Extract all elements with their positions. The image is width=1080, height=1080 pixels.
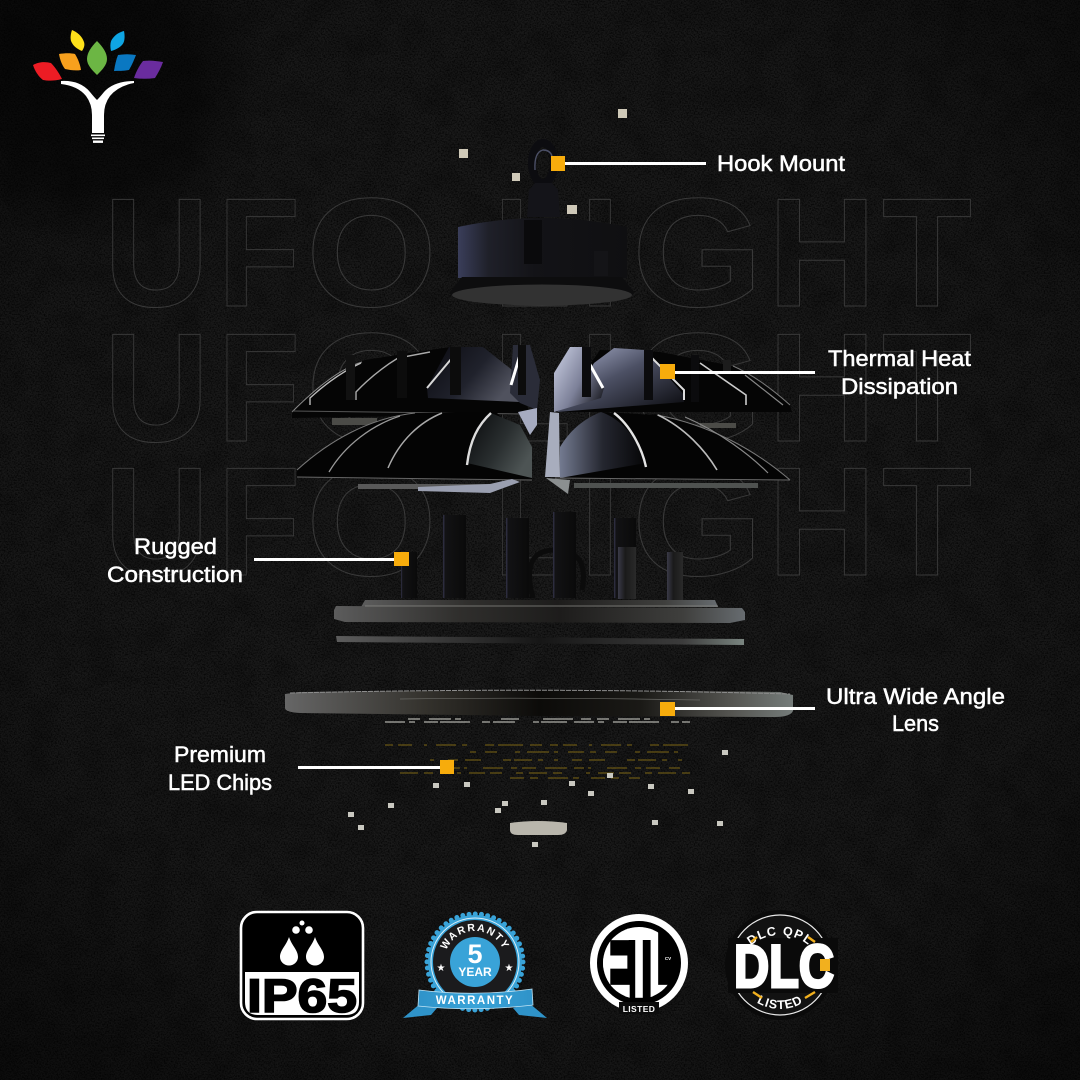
- callout: ultra wide angle lens: [660, 684, 1005, 736]
- callout: rugged construction: Rugged: [134, 534, 217, 559]
- badge: 5 year warranty: ★: [437, 963, 446, 974]
- callout: premium LED chips: Premium: [174, 742, 266, 767]
- badge: ETL listed: LISTED: [623, 1004, 655, 1014]
- heat sink fins: lower left: [297, 408, 537, 493]
- ghost outlined UFO LIGHT lettering, row 3: [104, 435, 972, 608]
- callout: ultra wide angle lens: Lens: [892, 711, 939, 736]
- ghost outlined UFO LIGHT lettering, row 3: T: [882, 435, 972, 608]
- callout: premium LED chips: [168, 742, 454, 795]
- ghost outlined UFO LIGHT lettering, row 1: [104, 166, 972, 339]
- callout: thermal heat dissipation: Thermal Heat: [828, 346, 971, 371]
- ghost outlined UFO LIGHT lettering, row 1: O: [306, 166, 437, 339]
- ghost outlined UFO LIGHT lettering, row 3: I: [580, 435, 620, 608]
- badge: IP65: IP65: [247, 969, 357, 1022]
- badge: 5 year warranty: 5: [467, 939, 483, 969]
- callout: rugged construction: [107, 534, 409, 587]
- ghost outlined UFO LIGHT lettering, row 1: F: [218, 166, 300, 339]
- callout: rugged construction: Construction: [107, 562, 243, 587]
- badge: DLC QPL listed: DLC QPL: [746, 926, 809, 945]
- callout: thermal heat dissipation: Dissipation: [841, 374, 958, 399]
- hook mount housing: [450, 143, 634, 306]
- badge: 5 year warranty: YEAR: [458, 965, 492, 979]
- ghost outlined UFO LIGHT lettering, row 2: I: [580, 301, 620, 474]
- badge: ETL listed: E: [600, 907, 631, 1019]
- ghost outlined UFO LIGHT lettering, row 3: G: [632, 435, 763, 608]
- ghost outlined UFO LIGHT lettering, row 2: L: [494, 301, 571, 474]
- badge: 5 year warranty: [403, 912, 547, 1018]
- ghost outlined UFO LIGHT lettering, row 3: F: [218, 435, 300, 608]
- ghost outlined UFO LIGHT lettering, row 3: L: [494, 435, 571, 608]
- heat sink fins: lower right: [545, 412, 790, 494]
- badge: 5 year warranty: WARRANTY: [436, 995, 514, 1007]
- rugged construction base plate with pillars: [334, 512, 745, 645]
- ghost outlined UFO LIGHT lettering, row 3: O: [306, 435, 437, 608]
- badge: DLC QPL listed: LISTED: [757, 995, 801, 1009]
- ghost outlined UFO LIGHT lettering, row 1: U: [104, 166, 209, 339]
- ghost outlined UFO LIGHT lettering, row 3: H: [768, 435, 876, 608]
- ghost outlined UFO LIGHT lettering, row 2: U: [104, 301, 209, 474]
- badge: ETL listed: CV: [665, 956, 671, 961]
- badge: IP65: [241, 912, 363, 1022]
- callout: hook mount: [551, 151, 845, 176]
- ghost outlined UFO LIGHT lettering, row 2: H: [768, 301, 876, 474]
- heat sink fins: upper left: [292, 345, 540, 425]
- center cap: [510, 821, 567, 835]
- ghost outlined UFO LIGHT lettering, row 1: L: [494, 166, 571, 339]
- ghost outlined UFO LIGHT lettering, row 2: G: [632, 301, 763, 474]
- ultra wide angle lens disc: [285, 690, 793, 717]
- ghost outlined UFO LIGHT lettering, row 3: U: [104, 435, 209, 608]
- badge: ETL listed: L: [648, 907, 676, 1019]
- badge: DLC QPL listed: DLC: [734, 933, 834, 1000]
- ghost outlined UFO LIGHT lettering, row 2: T: [882, 301, 972, 474]
- badge: 5 year warranty: ★: [505, 963, 514, 974]
- callout: hook mount: Hook Mount: [717, 151, 845, 176]
- ghost outlined UFO LIGHT lettering, row 2: F: [218, 301, 300, 474]
- heat sink fins: upper right: [554, 347, 792, 428]
- logo: tree bulb with colored leaves: [33, 30, 163, 143]
- ghost outlined UFO LIGHT lettering, row 2: O: [306, 301, 437, 474]
- ghost outlined UFO LIGHT lettering, row 2: [104, 301, 972, 474]
- ghost outlined UFO LIGHT lettering, row 1: H: [768, 166, 876, 339]
- callout: premium LED chips: LED Chips: [168, 770, 272, 795]
- ghost outlined UFO LIGHT lettering, row 1: I: [580, 166, 620, 339]
- white speckles beneath lens: [385, 719, 690, 722]
- ghost outlined UFO LIGHT lettering, row 1: T: [882, 166, 972, 339]
- loose LED chips: [348, 750, 728, 847]
- badge: ETL listed: T: [625, 907, 653, 1019]
- badge: DLC QPL listed: [725, 910, 838, 1020]
- floating LED chips near hook: [459, 109, 627, 214]
- badge: 5 year warranty: WARRANTY: [440, 924, 510, 948]
- callout: ultra wide angle lens: Ultra Wide Angle: [826, 684, 1005, 709]
- ghost outlined UFO LIGHT lettering, row 1: G: [632, 166, 763, 339]
- premium LED chips yellow scatter: [385, 745, 695, 778]
- callout: thermal heat dissipation: [660, 346, 971, 399]
